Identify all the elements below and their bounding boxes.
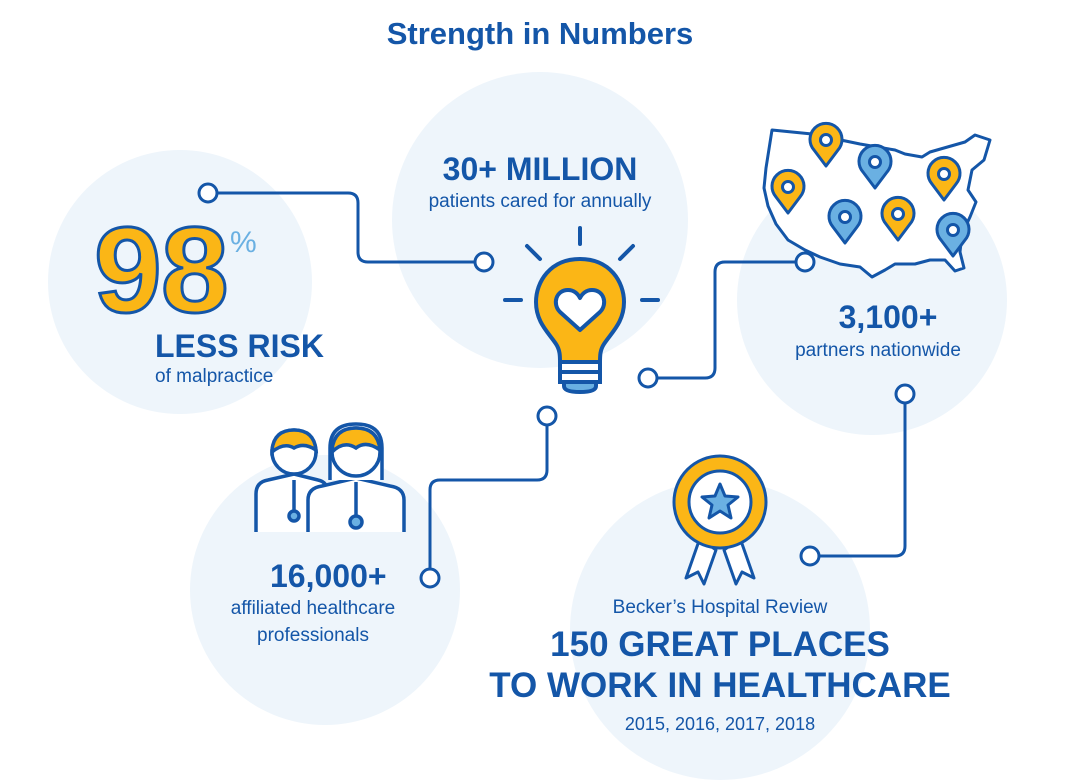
- stat: 98% less risk: LESS RISK: [155, 328, 324, 364]
- stat: 98% less risk: of malpractice: [155, 366, 273, 387]
- stat: 3,100+ partners: 3,100+: [839, 299, 937, 335]
- stat: 98% less risk: %: [230, 226, 257, 259]
- stat: 98% less risk: 98: [94, 202, 228, 338]
- stat: 30+ million: 30+ MILLION: [443, 151, 637, 187]
- stat: Becker's award: [489, 597, 951, 734]
- stat: 16,000+: 16,000+: [270, 558, 387, 594]
- stat: 98% less risk: [94, 202, 324, 387]
- connector dots: [199, 184, 914, 587]
- stat: Becker's award: TO WORK IN HEALTHCARE: [489, 666, 951, 705]
- icon: lightbulb: [505, 228, 658, 392]
- icon: US map with pins: [764, 123, 990, 277]
- stat: 30+ million: [429, 151, 652, 212]
- stat: Becker's award: 2015, 2016, 2017, 2018: [625, 714, 815, 734]
- stat: 30+ million: patients cared for annually: [429, 191, 652, 212]
- title: Strength in Numbers: [387, 16, 693, 51]
- stat: Becker's award: 150 GREAT PLACES: [550, 625, 890, 664]
- stat: 3,100+ partners: [795, 299, 961, 361]
- stat: 3,100+ partners: partners nationwide: [795, 340, 961, 361]
- icon: healthcare professionals: [256, 424, 404, 532]
- stat: Becker's award: Becker’s Hospital Review: [613, 597, 828, 618]
- stat: 16,000+: [231, 558, 395, 646]
- connector lines: [218, 193, 905, 568]
- stat: 16,000+: affiliated healthcare: [231, 598, 395, 619]
- stat: 16,000+: professionals: [257, 625, 369, 646]
- icon: award ribbon: [674, 456, 766, 584]
